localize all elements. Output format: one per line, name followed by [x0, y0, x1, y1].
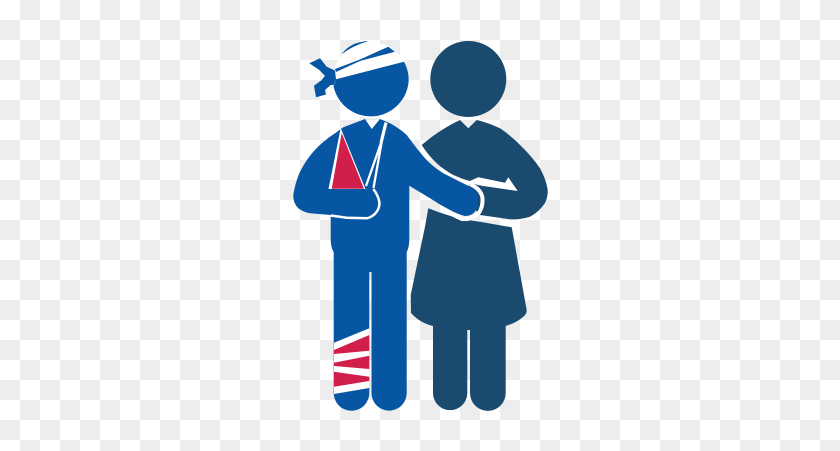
forearm outline [331, 189, 379, 218]
man body and legs [293, 119, 478, 411]
bandage knot tails [309, 58, 336, 97]
cast stripe 2 [334, 356, 369, 369]
woman head [430, 41, 506, 117]
bandage sliver top [342, 41, 368, 54]
figure: carer woman [411, 41, 548, 411]
sling white border [328, 128, 366, 189]
sling strap right line [374, 143, 382, 188]
cast stripe 3 [334, 372, 369, 387]
cast stripe 1 [334, 335, 369, 354]
sling red triangle [332, 133, 364, 189]
leg cast white wrap [334, 328, 369, 394]
woman skirt and legs [411, 208, 527, 411]
figure: injured man [293, 41, 483, 411]
sling strap top [381, 122, 386, 143]
woman upper body and arm [422, 120, 548, 219]
hand halo [446, 184, 483, 219]
bandage sliver right [335, 47, 395, 72]
man head bandage base [333, 42, 409, 118]
sling strap left line [366, 143, 381, 186]
woman hand fold line [468, 177, 518, 191]
man head lower part [334, 62, 409, 116]
leg cast red stripes [334, 335, 369, 387]
